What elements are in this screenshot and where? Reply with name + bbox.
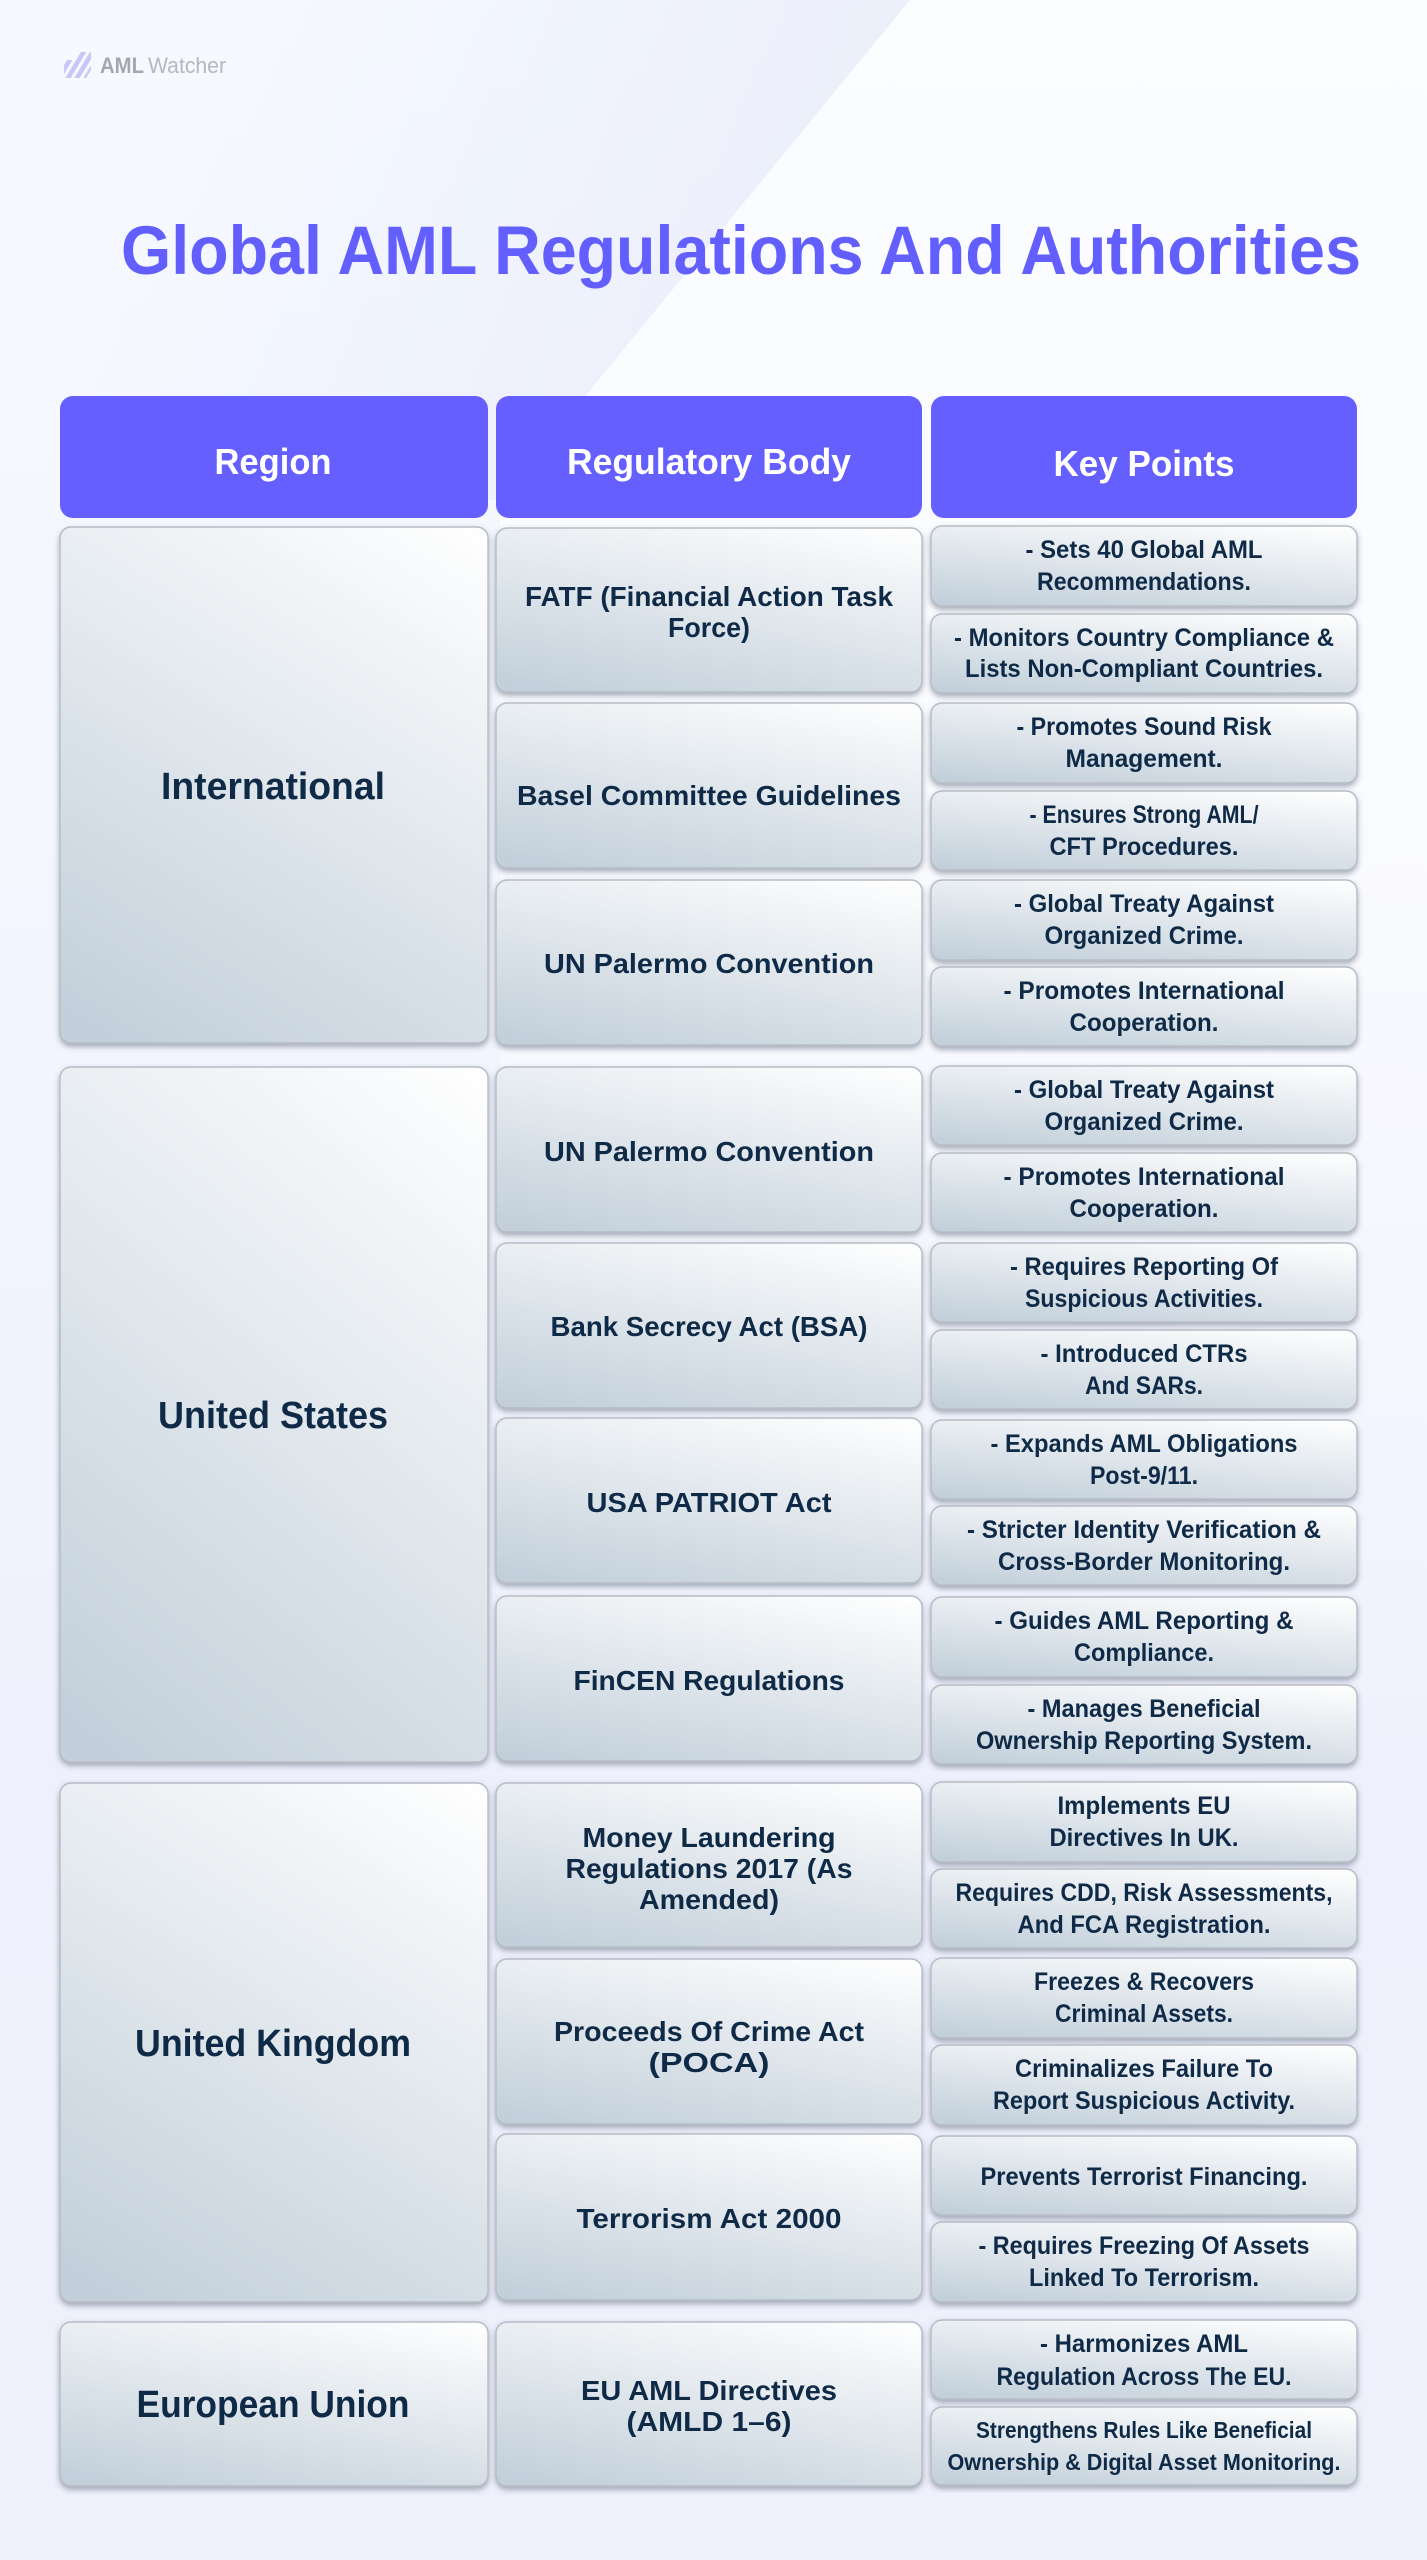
region cell: United States: United States	[158, 1395, 388, 1437]
table header	[60, 396, 1357, 518]
region cell: United Kingdom: United Kingdom	[135, 2023, 411, 2065]
key point: failure to report	[931, 2045, 1357, 2125]
regulatory body: UN Palermo	[496, 880, 922, 1045]
logo: AML Watcher	[64, 52, 226, 78]
key point: terrorist financing: Prevents Terrorist Financing.	[980, 2163, 1308, 2191]
key point: cooperation: - Promotes International	[1004, 1163, 1284, 1191]
regulatory body: UN Palermo: UN Palermo Convention	[544, 1136, 874, 1167]
key point: failure to report: Report Suspicious Activity.	[993, 2087, 1295, 2115]
key point: suspicious activities	[931, 1243, 1357, 1322]
key point: AML reporting: Compliance.	[1074, 1639, 1214, 1667]
regulatory body: Money Laundering Regulations: Amended)	[639, 1884, 779, 1915]
key point: EU directives: Directives In UK.	[1050, 1824, 1238, 1852]
regulatory body: UN Palermo	[496, 1067, 922, 1232]
key point: cooperation: Cooperation.	[1070, 1009, 1218, 1037]
key point: CDD and FCA: And FCA Registration.	[1018, 1911, 1270, 1939]
regulatory body: Money Laundering Regulations: Regulations 2017 (As	[566, 1853, 852, 1884]
key point: AML/CFT procedures	[931, 791, 1357, 870]
key point: strengthens rules	[931, 2407, 1357, 2485]
regulatory body: EU AML Directives: (AMLD 1–6)	[626, 2406, 792, 2437]
regulatory body: POCA	[496, 1959, 922, 2124]
panel: United States	[60, 1066, 1357, 1764]
key point: CTRs and SARs	[931, 1330, 1357, 1409]
key point: criminal assets: Freezes & Recovers	[1034, 1968, 1254, 1996]
regulatory body: Money Laundering Regulations: Money Laundering	[582, 1822, 836, 1853]
key point: beneficial ownership: Ownership Reporting System.	[976, 1727, 1312, 1755]
key point: monitors compliance: - Monitors Country Compliance &	[954, 624, 1334, 652]
region cell: International: International	[161, 766, 385, 808]
key point: treaty: Organized Crime.	[1044, 1108, 1244, 1136]
panel: United Kingdom	[60, 1782, 1357, 2302]
region cell: European Union: European Union	[136, 2384, 410, 2426]
regulatory body: Terrorism Act: Terrorism Act 2000	[576, 2203, 842, 2234]
key point: terrorist financing	[931, 2136, 1357, 2215]
regulatory body: UN Palermo: UN Palermo Convention	[544, 948, 874, 979]
key point: criminal assets: Criminal Assets.	[1055, 2000, 1233, 2028]
key point: identity verification: - Stricter Identity Verification &	[967, 1516, 1321, 1544]
icon: striped check mark	[64, 52, 91, 78]
key point: 40 recommendations	[931, 526, 1357, 606]
key point: strengthens rules: Ownership & Digital Asset Monitoring.	[948, 2449, 1340, 2475]
key point: post 9/11: - Expands AML Obligations	[990, 1430, 1298, 1458]
key point: treaty: - Global Treaty Against	[1014, 890, 1275, 918]
regulatory body: FATF	[496, 528, 922, 692]
key point: AML/CFT procedures: - Ensures Strong AML/	[1030, 801, 1259, 829]
key point: EU directives: Implements EU	[1058, 1792, 1230, 1820]
regulatory body: POCA: Proceeds Of Crime Act	[554, 2016, 864, 2047]
regulatory body: Money Laundering Regulations	[496, 1783, 922, 1947]
key point: risk management: - Promotes Sound Risk	[1016, 713, 1272, 741]
key point: freezing assets	[931, 2222, 1357, 2302]
key point: beneficial ownership	[931, 1685, 1357, 1764]
regulatory body: FATF: Force)	[668, 612, 750, 643]
region cell: European Union	[60, 2322, 488, 2486]
key point: AML/CFT procedures: CFT Procedures.	[1050, 833, 1238, 861]
key point: treaty: - Global Treaty Against	[1014, 1076, 1275, 1104]
regulatory body: FinCEN: FinCEN Regulations	[574, 1665, 844, 1696]
key point: CDD and FCA: Requires CDD, Risk Assessments,	[956, 1879, 1332, 1907]
regulatory body: BSA: Bank Secrecy Act (BSA)	[550, 1311, 868, 1342]
key point: 40 recommendations: Recommendations.	[1037, 568, 1251, 596]
header: Regulatory Body	[496, 396, 922, 518]
regulatory body: POCA: (POCA)	[648, 2047, 770, 2078]
key point: harmonizes regulation: - Harmonizes AML	[1040, 2330, 1248, 2358]
key point: AML reporting	[931, 1597, 1357, 1677]
key point: suspicious activities: - Requires Reporting Of	[1010, 1253, 1279, 1281]
key point: identity verification	[931, 1506, 1357, 1585]
key point: cooperation: - Promotes International	[1004, 977, 1284, 1005]
title: Global AML Regulations And Authorities	[121, 212, 1361, 289]
key point: CDD and FCA	[931, 1869, 1357, 1948]
key point: suspicious activities: Suspicious Activities.	[1025, 1285, 1263, 1313]
key point: post 9/11: Post-9/11.	[1090, 1462, 1198, 1490]
key point: treaty: Organized Crime.	[1044, 922, 1244, 950]
logo wordmark: Watcher	[148, 53, 226, 78]
key point: treaty	[931, 1066, 1357, 1145]
header: Region	[60, 396, 488, 518]
key point: monitors compliance	[931, 614, 1357, 693]
regulatory body: EU AML Directives	[496, 2322, 922, 2486]
key point: failure to report: Criminalizes Failure To	[1015, 2055, 1273, 2083]
header: Key Points: Key Points	[1054, 443, 1234, 484]
key point: EU directives	[931, 1782, 1357, 1862]
key point: cooperation: Cooperation.	[1070, 1195, 1218, 1223]
regulatory body: USA PATRIOT	[496, 1418, 922, 1583]
key point: cooperation	[931, 1153, 1357, 1232]
key point: CTRs and SARs: And SARs.	[1085, 1372, 1203, 1400]
regulatory body: USA PATRIOT: USA PATRIOT Act	[586, 1487, 832, 1518]
key point: freezing assets: - Requires Freezing Of Assets	[978, 2232, 1310, 2260]
key point: harmonizes regulation	[931, 2320, 1357, 2399]
key point: risk management: Management.	[1066, 745, 1222, 773]
header: Key Points	[931, 396, 1357, 518]
region cell: United Kingdom	[60, 1783, 488, 2302]
key point: post 9/11	[931, 1420, 1357, 1499]
regulatory body: Terrorism Act	[496, 2134, 922, 2300]
key point: criminal assets	[931, 1958, 1357, 2038]
region cell: International	[60, 527, 488, 1043]
key point: harmonizes regulation: Regulation Across The EU.	[996, 2363, 1292, 2391]
region cell: United States	[60, 1067, 488, 1762]
header: Regulatory Body: Regulatory Body	[567, 441, 851, 482]
key point: beneficial ownership: - Manages Beneficial	[1028, 1695, 1260, 1723]
key point: monitors compliance: Lists Non-Compliant Countries.	[965, 655, 1323, 683]
panel: European Union	[60, 2320, 1357, 2486]
key point: strengthens rules: Strengthens Rules Like Beneficial	[976, 2417, 1312, 2443]
key point: cooperation	[931, 967, 1357, 1046]
regulatory body: FATF: FATF (Financial Action Task	[525, 581, 893, 612]
header: Region: Region	[214, 441, 332, 482]
regulatory body: EU AML Directives: EU AML Directives	[581, 2375, 837, 2406]
key point: freezing assets: Linked To Terrorism.	[1029, 2264, 1259, 2292]
regulatory body: Basel: Basel Committee Guidelines	[517, 780, 901, 811]
logo wordmark: AML	[100, 53, 144, 78]
key point: risk management	[931, 703, 1357, 783]
key point: AML reporting: - Guides AML Reporting &	[994, 1607, 1294, 1635]
key point: identity verification: Cross-Border Monitoring.	[998, 1548, 1290, 1576]
regulatory body: FinCEN	[496, 1596, 922, 1761]
key point: treaty	[931, 880, 1357, 960]
regulatory body: BSA	[496, 1243, 922, 1408]
panel: International	[60, 526, 1357, 1046]
regulatory body: Basel	[496, 703, 922, 868]
key point: 40 recommendations: - Sets 40 Global AML	[1026, 536, 1262, 564]
key point: CTRs and SARs: - Introduced CTRs	[1040, 1340, 1248, 1368]
